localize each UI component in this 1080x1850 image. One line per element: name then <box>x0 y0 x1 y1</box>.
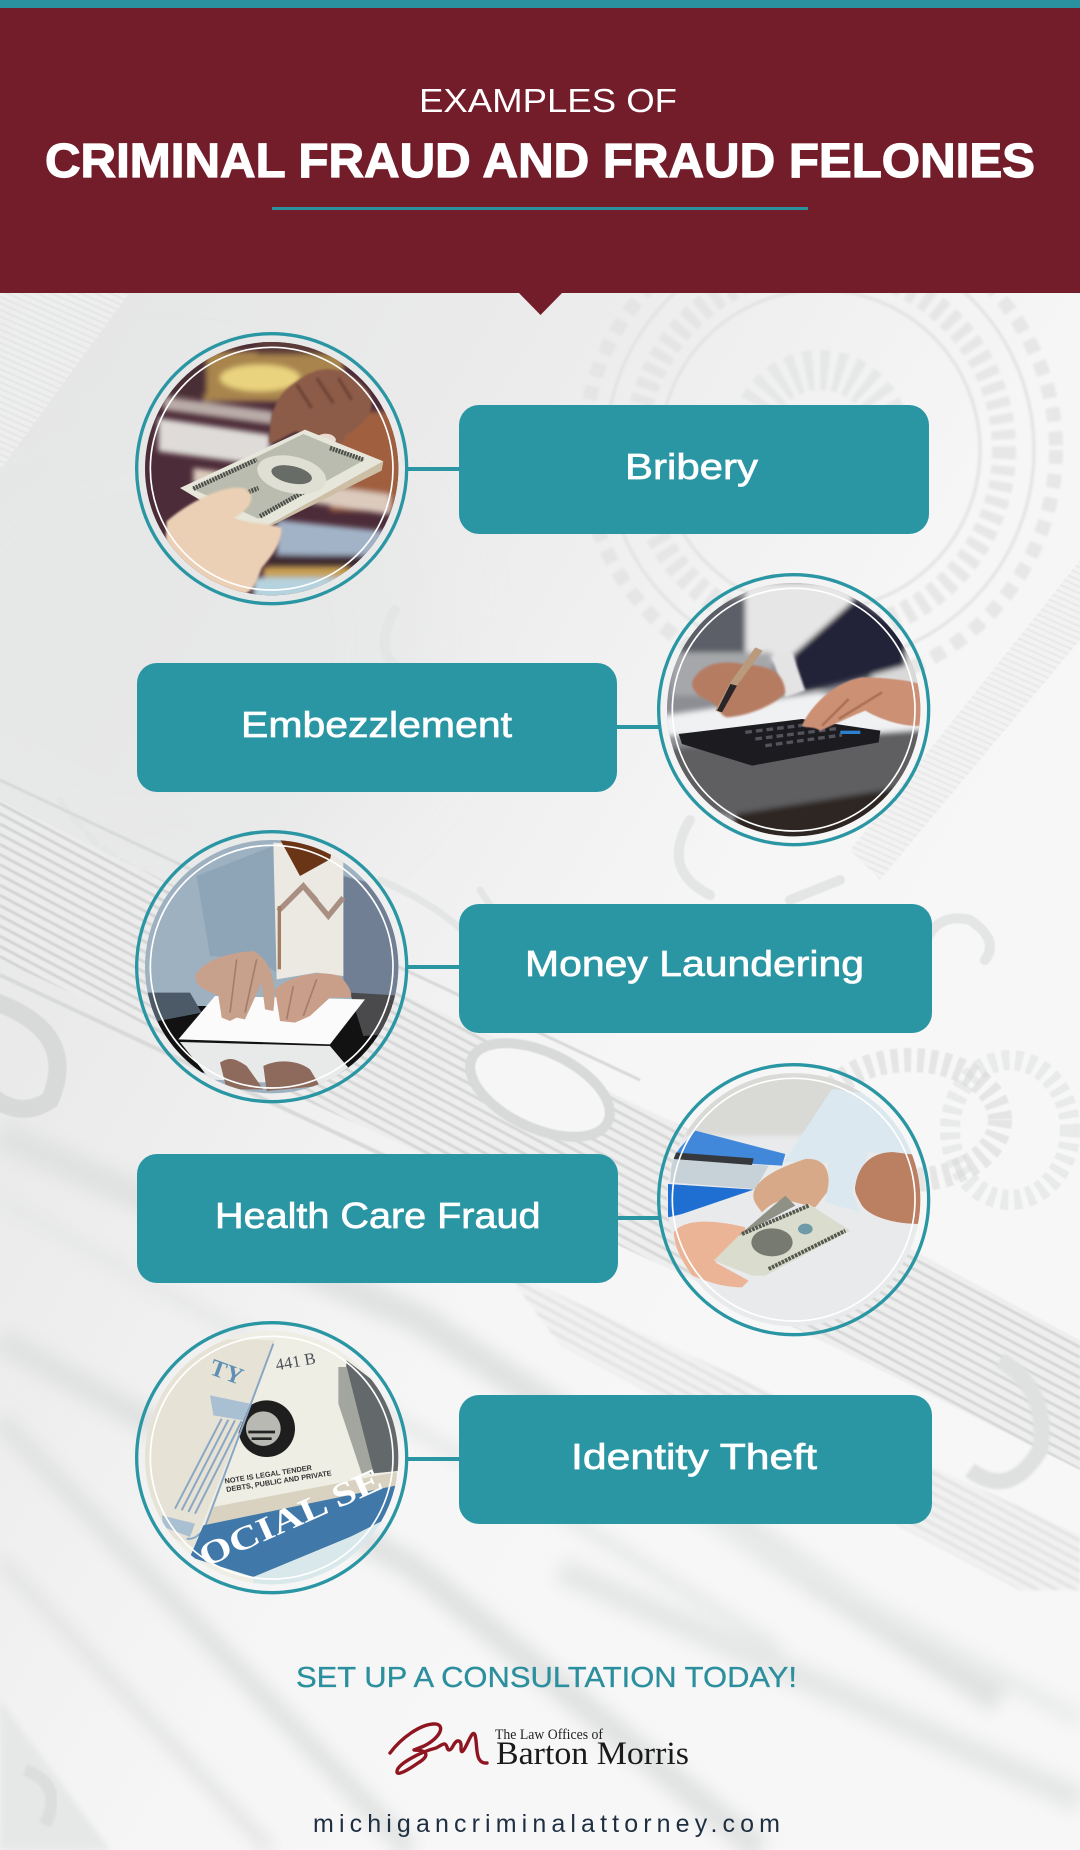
white inner ring <box>150 845 393 1088</box>
item: Embezzlement <box>137 569 936 853</box>
photo: cash handed over <box>130 328 414 612</box>
item: Money Laundering <box>130 826 932 1110</box>
label box <box>459 405 929 534</box>
dark lower <box>140 1006 407 1073</box>
connector <box>616 725 660 729</box>
subheading: EXAMPLES OF <box>419 83 677 120</box>
teal outer ring <box>659 1065 929 1335</box>
writing hand <box>692 662 785 717</box>
item: Health Care Fraud <box>137 1059 936 1343</box>
label box <box>137 663 617 792</box>
photo: cash passed across a desk <box>652 1059 936 1343</box>
teal outer ring <box>659 575 929 845</box>
seal: treasury seal watermark <box>584 214 1056 686</box>
photo: social security card on a bill: OCIAL SE <box>193 1461 388 1575</box>
white inner ring <box>672 1078 915 1321</box>
teal outer ring <box>137 334 407 604</box>
label text: Identity Theft <box>571 1436 817 1477</box>
photo: social security card on a bill: TY <box>206 1355 246 1391</box>
teal outer ring <box>137 832 407 1102</box>
teal outer ring <box>137 1323 407 1593</box>
reflection <box>180 1042 348 1086</box>
blue card <box>190 1485 397 1577</box>
right fist <box>855 1152 922 1224</box>
label text: Money Laundering <box>525 943 864 984</box>
torn edge <box>207 1472 397 1525</box>
photo: social security card on a bill: DEBTS, PUBLIC AND PRIVATE <box>226 1468 332 1494</box>
item: Bribery <box>130 328 929 612</box>
serial marks <box>60 610 990 960</box>
top hand <box>269 369 372 454</box>
typing hand <box>802 677 922 731</box>
card left <box>140 1337 275 1547</box>
sleeve <box>784 1089 912 1212</box>
connector <box>406 1457 460 1461</box>
call to action: SET UP A CONSULTATION TODAY! <box>296 1662 797 1694</box>
header pointer <box>518 292 563 315</box>
ornament band: upper left to lower right <box>0 800 1080 1470</box>
label box <box>459 1395 932 1524</box>
white inner ring <box>150 1336 393 1579</box>
left hand <box>674 1222 749 1287</box>
photo: social security card on a bill: 441 B <box>274 1349 317 1374</box>
label box <box>459 904 932 1033</box>
soft lower bands <box>0 1135 1080 1850</box>
bill caption: NOTE IS LEGAL TENDER <box>224 1463 313 1486</box>
website: michigancriminalattorney.com <box>313 1810 780 1838</box>
photo: social security card on a bill <box>130 1317 414 1601</box>
envelope <box>178 996 365 1044</box>
cash <box>714 1204 850 1276</box>
logo name: Barton Morris <box>496 1736 689 1772</box>
seal <box>238 1400 295 1457</box>
white inner ring <box>150 347 393 590</box>
logo small line: The Law Offices of <box>495 1727 603 1743</box>
label text: Embezzlement <box>241 704 512 745</box>
cash stack <box>180 430 383 528</box>
white inner ring <box>672 588 915 831</box>
label box <box>137 1154 618 1283</box>
label text: Health Care Fraud <box>215 1195 540 1236</box>
folders <box>672 1131 785 1166</box>
header band <box>0 0 1080 315</box>
connector <box>406 467 460 471</box>
item: Identity Theft <box>130 1317 932 1601</box>
top accent bar <box>0 0 1080 8</box>
neck <box>280 839 335 876</box>
upper hand <box>753 1159 829 1212</box>
photo: hands on a calculator <box>652 569 936 853</box>
connector <box>616 1216 660 1220</box>
label text: Bribery <box>625 446 758 487</box>
connector <box>406 965 460 969</box>
signature mark <box>390 1724 487 1773</box>
shirt <box>273 843 343 979</box>
portrait <box>346 1360 398 1474</box>
bottom hand <box>163 488 282 595</box>
main heading: CRIMINAL FRAUD AND FRAUD FELONIES <box>45 135 1035 188</box>
logo: The Law Offices of Barton Morris <box>390 1724 689 1773</box>
heading underline <box>272 207 808 210</box>
calculator <box>679 719 880 766</box>
hands <box>195 951 275 1021</box>
photo: tearing an envelope <box>130 826 414 1110</box>
